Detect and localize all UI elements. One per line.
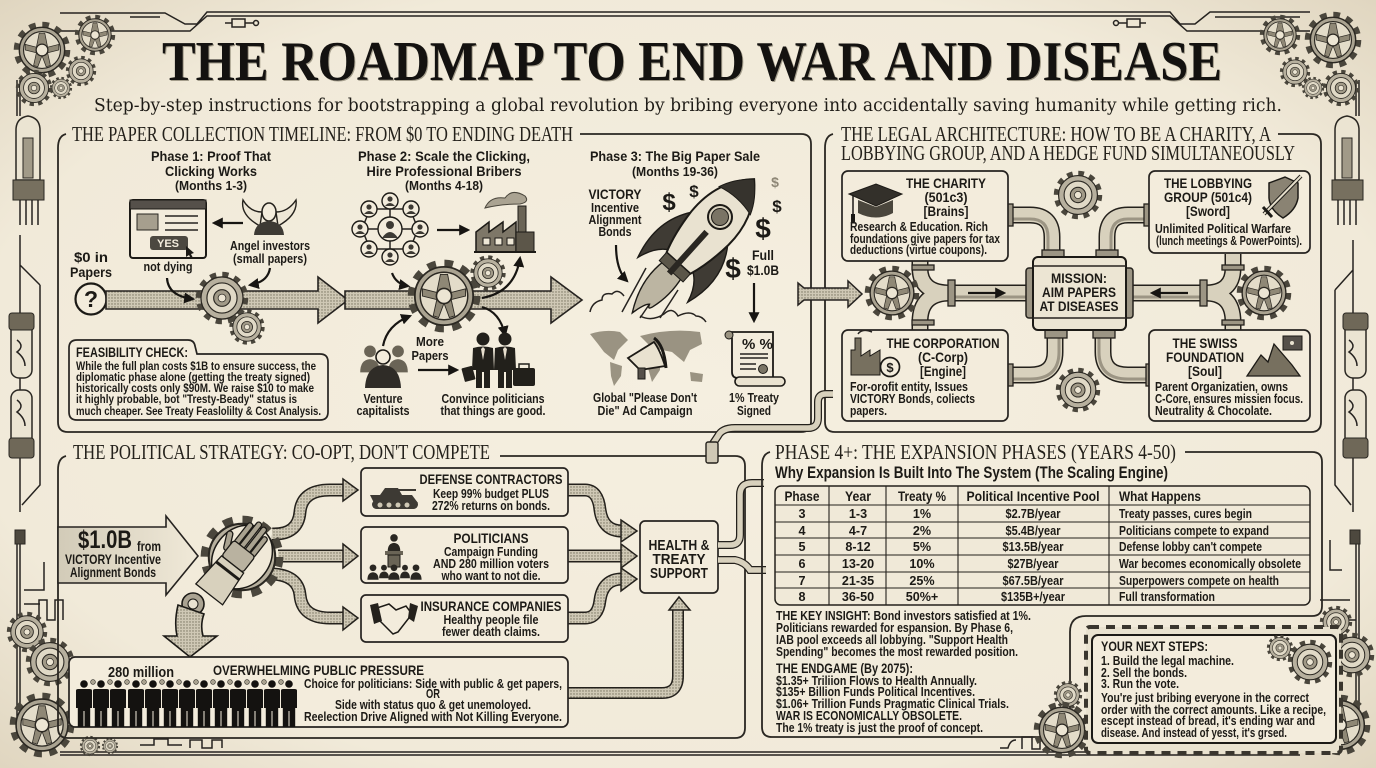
table: expansion phases: 6 xyxy=(798,557,806,571)
icons: dollar signs: $ xyxy=(771,174,779,190)
label: more papers: More xyxy=(416,335,444,349)
box: charity: [Brains] xyxy=(924,203,968,219)
phase 2 heading: Hire Professional Bribers xyxy=(366,163,522,179)
table: expansion phases: 5 xyxy=(798,540,806,554)
label: full $1.0B xyxy=(747,247,779,278)
arrows inside pipes xyxy=(968,292,1188,294)
labels: campaign and treaty: Signed xyxy=(737,404,771,418)
panel: paper collection timeline xyxy=(58,122,811,432)
side tubes left xyxy=(9,313,34,544)
phase 3 heading xyxy=(590,148,760,179)
table: expansion phases: Treaty % xyxy=(898,488,946,504)
callout: feasibility check xyxy=(69,340,328,420)
right corner gears xyxy=(1262,15,1358,104)
table: expansion phases: Year xyxy=(845,488,871,504)
icon: factory with coin xyxy=(851,330,900,376)
panel: legal architecture xyxy=(825,122,1321,432)
phase 2 heading: Phase 2: Scale the Clicking, xyxy=(358,148,530,164)
box: defense contractors: DEFENSE CONTRACTORS xyxy=(420,471,562,487)
table: expansion phases: 50%+ xyxy=(906,590,938,604)
table: expansion phases: Full transformation xyxy=(1119,590,1215,604)
table: expansion phases: Politicians compete to expand xyxy=(1119,524,1269,538)
text block: next steps: You're just bribing everyone in the correct xyxy=(1101,691,1310,705)
text block: key insight: Politicians rewarded for espansion. By Phase 6, xyxy=(776,621,1013,635)
box: charity: deductions (virtue coupons). xyxy=(850,243,987,257)
panel: expansion phases xyxy=(762,440,1322,737)
text block: endgame: $1.06+ Trillion Funds Pragmatic Clinical Trials. xyxy=(776,697,1009,711)
box: swiss foundation xyxy=(1149,330,1310,421)
text block: key insight: THE KEY INSIGHT: Bond investors satisfied at 1%. xyxy=(776,609,1031,623)
icon: mechanical hand in gear xyxy=(164,510,285,657)
icon: treaty scroll xyxy=(725,331,785,386)
box: lobbying group: THE LOBBYING xyxy=(1164,175,1252,191)
box: health and treaty support: TREATY xyxy=(652,551,706,568)
icon: treaty scroll: % % xyxy=(742,336,773,353)
box: politicians: POLITICIANS xyxy=(454,530,528,546)
icon: tank xyxy=(370,488,418,509)
heading: legal architecture: THE LEGAL ARCHITECTURE: HOW TO BE A CHARITY, A xyxy=(841,122,1272,146)
table: expansion phases: $27B/year xyxy=(1008,557,1059,571)
label: full $1.0B: $1.0B xyxy=(747,262,779,278)
box: health and treaty support: HEALTH & xyxy=(648,537,710,554)
table: expansion phases xyxy=(775,486,1310,605)
connector pipes xyxy=(706,394,833,570)
vacuum tube top left xyxy=(13,116,44,225)
table: expansion phases: $2.7B/year xyxy=(1006,507,1061,521)
box: public pressure: 280 million xyxy=(108,664,174,681)
phase 1 heading: Phase 1: Proof That xyxy=(151,148,271,164)
icon: angel investor xyxy=(243,200,296,235)
arrow: $1.0B funding: $1.0B xyxy=(78,526,132,554)
table: expansion phases: 8-12 xyxy=(845,540,871,554)
icons: dollar signs: $ xyxy=(755,213,771,244)
box: corporation: THE CORPORATION xyxy=(886,335,1000,351)
icon: graduation cap xyxy=(849,184,902,222)
text block: next steps: escept instead of bread, it's ending war and xyxy=(1101,714,1315,728)
label: victory bonds: Alignment xyxy=(588,213,642,227)
icon: shield and sword xyxy=(1263,176,1301,218)
table: expansion phases: $135B+/year xyxy=(1001,590,1065,604)
label: more papers: Papers xyxy=(412,349,448,363)
table: expansion phases: 4-7 xyxy=(849,524,867,538)
box: politicians: Campaign Funding xyxy=(444,545,538,559)
arrow: bonds to exhaust xyxy=(616,245,627,281)
table: expansion phases: 10% xyxy=(909,557,935,571)
callout: feasibility check: diplomatic phase alone (getting the treaty signed) xyxy=(76,370,310,384)
box: corporation: VICTORY Bonds, coliects xyxy=(850,392,975,406)
heading: political strategy: THE POLITICAL STRATEGY: CO-OPT, DON'T COMPETE xyxy=(73,440,490,464)
label: more papers xyxy=(412,335,448,363)
labels: vc and politicians: capitalists xyxy=(356,404,410,418)
arrow: angel to browser xyxy=(214,222,243,224)
icon: question mark start: ? xyxy=(84,286,98,312)
callout: feasibility check: historically costs only $90M. We raise $10 to make xyxy=(76,381,314,395)
box: defense contractors: Keep 99% budget PLUS xyxy=(433,487,549,501)
box: public pressure: OR xyxy=(426,687,440,701)
table: expansion phases: 21-35 xyxy=(842,574,874,588)
label: angel investors: (small papers) xyxy=(233,252,307,266)
box: public pressure xyxy=(69,657,568,727)
icon: factory xyxy=(474,192,536,252)
icon: handshake xyxy=(370,603,418,634)
icon: factory with coin: $ xyxy=(886,360,894,375)
box: charity: foundations give papers for tax xyxy=(850,232,1000,246)
text block: endgame: The 1% treaty is just the proof of concept. xyxy=(776,721,983,735)
box: insurance companies xyxy=(361,595,568,642)
box: swiss foundation: THE SWISS xyxy=(1172,335,1238,351)
box: public pressure: Side with status quo & get unemoloyed. xyxy=(335,698,531,712)
box: public pressure: OVERWHELMING PUBLIC PRESSURE xyxy=(213,662,424,678)
box: health and treaty support: SUPPORT xyxy=(650,565,708,582)
icons: dollar signs: $ xyxy=(725,253,741,284)
arrow: timeline to legal architecture xyxy=(798,281,862,307)
subtitle: Step-by-step instructions for bootstrapping a global revolution by bribing everyone into accidentally saving humanity while getting rich. xyxy=(94,96,1282,116)
arrow: $1.0B funding xyxy=(58,516,198,595)
box: lobbying group: GROUP (501c4) xyxy=(1164,189,1252,205)
arrow: $1.0B funding: from xyxy=(137,538,161,554)
arrows: phase two flows xyxy=(383,258,520,346)
box: corporation: papers. xyxy=(850,404,887,418)
icon: politicians with briefcase xyxy=(461,332,535,388)
box: corporation: For-orofit entity, Issues xyxy=(850,380,968,394)
box: politicians: AND 280 million voters xyxy=(433,557,549,571)
panel: political strategy xyxy=(58,440,745,738)
phase 3 heading: Phase 3: The Big Paper Sale xyxy=(590,148,760,164)
box: charity: (501c3) xyxy=(924,189,968,205)
icons: next steps gears xyxy=(1268,636,1330,682)
vacuum tube top right xyxy=(1332,116,1363,225)
box: public pressure: Reelection Drive Aligned with Not Killing Everyone. xyxy=(304,710,562,724)
table: expansion phases: Defense lobby can't compete xyxy=(1119,540,1262,554)
panel: your next steps xyxy=(1037,627,1341,755)
arrow: not dying to gear xyxy=(167,278,193,299)
icon: bribers network xyxy=(352,193,428,265)
text block: key insight xyxy=(776,609,1031,659)
labels: campaign and treaty: Global "Please Don't xyxy=(593,391,698,405)
text block: next steps: 1. Build the legal machine. xyxy=(1101,654,1234,668)
callout: feasibility check: it highly probable, bot "Tresty-Beady" status is xyxy=(76,392,297,406)
box: defense contractors: 272% returns on bonds. xyxy=(432,499,550,513)
arrow: funding to treaty xyxy=(753,283,755,321)
flow arrows left xyxy=(272,479,358,630)
arrow: network to factory xyxy=(437,229,468,231)
table: expansion phases: 13-20 xyxy=(842,557,874,571)
icons: dollar signs: $ xyxy=(662,189,676,216)
text block: next steps: YOUR NEXT STEPS: xyxy=(1101,638,1208,654)
arrow: small papers to gear xyxy=(250,268,270,285)
side tubes right xyxy=(1343,313,1368,544)
table: expansion phases: Political Incentive Pool xyxy=(966,488,1100,504)
icon: question mark start xyxy=(76,284,106,314)
labels: campaign and treaty xyxy=(593,391,779,418)
box: swiss foundation: Parent Organizatien, owns xyxy=(1155,380,1288,394)
box: insurance companies: fewer death claims. xyxy=(442,625,540,639)
text block: next steps: 3. Run the vote. xyxy=(1101,677,1179,691)
icon: browser window: YES xyxy=(157,238,179,250)
icons: panel gears xyxy=(867,173,1289,410)
icon: venture capitalists xyxy=(360,346,408,388)
box: corporation: [Engine] xyxy=(920,363,966,379)
table: expansion phases: $67.5B/year xyxy=(1002,574,1064,588)
labels: vc and politicians: Venture xyxy=(364,392,402,406)
label: victory bonds: Incentive xyxy=(591,201,639,215)
box: swiss foundation: C-Core, ensures missien focus. xyxy=(1155,392,1303,406)
table: expansion phases: 36-50 xyxy=(842,590,874,604)
box: charity: Research & Education. Rich xyxy=(850,220,988,234)
table: expansion phases: 5% xyxy=(913,540,931,554)
phase 1 heading: (Months 1-3) xyxy=(175,179,247,193)
table: expansion phases: 7 xyxy=(798,574,806,588)
arrow: timeline two xyxy=(345,277,582,323)
labels: campaign and treaty: Die" Ad Campaign xyxy=(598,404,692,418)
text block: next steps xyxy=(1101,638,1326,740)
label: victory bonds xyxy=(588,186,642,239)
table: expansion phases: 2% xyxy=(913,524,931,538)
table: expansion phases: Phase xyxy=(784,488,820,504)
bottom corner gears xyxy=(9,607,1372,755)
label: angel investors: Angel investors xyxy=(230,239,310,253)
table: expansion phases: 1-3 xyxy=(849,507,867,521)
icons: dollar signs: $ xyxy=(689,182,699,201)
heading: timeline: THE PAPER COLLECTION TIMELINE: FROM $0 TO ENDING DEATH xyxy=(72,122,573,146)
arrow: $1.0B funding: Alignment Bonds xyxy=(70,564,156,580)
text block: endgame: WAR IS ECONOMICALLY OBSOLETE. xyxy=(776,709,962,723)
table: expansion phases: 3 xyxy=(798,507,806,521)
phase 2 heading: (Months 4-18) xyxy=(405,179,483,193)
box: mission: AIM PAPERS xyxy=(1042,284,1116,300)
box: lobbying group: Unlimited Political Warfare xyxy=(1155,222,1291,236)
table: expansion phases: What Happens xyxy=(1119,488,1201,504)
left corner gears xyxy=(17,17,113,104)
labels: vc and politicians xyxy=(356,392,546,418)
pipes network xyxy=(912,204,1244,386)
phase 2 heading xyxy=(358,148,530,193)
text block: endgame: THE ENDGAME (By 2075): xyxy=(776,660,913,676)
table: expansion phases: 8 xyxy=(798,590,806,604)
icon: phase two gears xyxy=(411,257,504,329)
box: swiss foundation: Neutrality & Chocolate. xyxy=(1155,404,1272,418)
label: angel investors xyxy=(230,239,310,266)
box: lobbying group: (lunch meetings & PowerPoints). xyxy=(1156,234,1302,248)
heading: legal architecture xyxy=(841,122,1295,165)
text block: key insight: IAB pool exceeds all lobbying. "Support Health xyxy=(776,633,1008,647)
table: expansion phases: Superpowers compete on health xyxy=(1119,574,1279,588)
arrow: vc to politicians xyxy=(418,369,457,371)
table: expansion phases: 1% xyxy=(913,507,931,521)
box: mission xyxy=(1026,257,1133,330)
box: corporation xyxy=(842,330,1008,421)
box: lobbying group xyxy=(1149,171,1310,253)
title: THE ROADMAP TO END WAR AND DISEASE xyxy=(162,31,1222,93)
arrow: timeline one xyxy=(106,277,348,323)
label: victory bonds: Bonds xyxy=(598,225,632,239)
box: corporation: (C-Corp) xyxy=(918,349,968,365)
text block: next steps: disease. And instead of yesst, it's grsed. xyxy=(1101,726,1287,740)
phase 3 heading: (Months 19-36) xyxy=(632,165,718,179)
callout: feasibility check: much cheaper. See Treaty Feaslolilty & Cost Analysis. xyxy=(76,404,321,418)
icons: dollar signs: $ xyxy=(772,197,782,216)
table: expansion phases: 4 xyxy=(798,524,806,538)
label: $0 in papers: Papers xyxy=(70,264,112,280)
phase 1 heading xyxy=(151,148,271,193)
icon: world map with megaphone xyxy=(590,331,703,386)
icon: crowd of people xyxy=(76,680,297,727)
box: politicians xyxy=(361,527,568,583)
table: expansion phases: 25% xyxy=(909,574,935,588)
label: full $1.0B: Full xyxy=(752,247,774,263)
box: politicians: who want to not die. xyxy=(441,569,540,583)
box: insurance companies: INSURANCE COMPANIES xyxy=(420,598,562,614)
labels: vc and politicians: Convince politicians xyxy=(442,392,544,406)
box: public pressure: Choice for politicians: Side with public & get papers, xyxy=(304,677,562,691)
icon: mountains and flag xyxy=(1247,336,1302,376)
box: swiss foundation: FOUNDATION xyxy=(1166,349,1244,365)
text block: next steps: order with the correct amounts. Like a recipe, xyxy=(1101,703,1326,717)
label: $0 in papers: $0 in xyxy=(74,249,108,265)
subheading: scaling engine: Why Expansion Is Built Into The System (The Scaling Engine) xyxy=(775,464,1168,482)
label: not dying: not dying xyxy=(144,260,192,274)
arrow: $1.0B funding: VICTORY Incentive xyxy=(65,551,161,567)
text block: next steps: 2. Sell the bonds. xyxy=(1101,666,1187,680)
box: swiss foundation: [Soul] xyxy=(1188,363,1222,379)
table: expansion phases: Treaty passes, cures begin xyxy=(1119,507,1252,521)
box: lobbying group: [Sword] xyxy=(1186,203,1230,219)
table: expansion phases: $13.5B/year xyxy=(1002,540,1064,554)
heading: expansion phases: PHASE 4+: THE EXPANSION PHASES (YEARS 4-50) xyxy=(775,440,1176,464)
label: victory bonds: VICTORY xyxy=(588,186,642,202)
box: mission: AT DISEASES xyxy=(1040,298,1118,314)
box: defense contractors xyxy=(361,468,568,516)
icon: podium and audience xyxy=(367,534,422,580)
box: charity: THE CHARITY xyxy=(906,175,987,191)
icon: phase one gears xyxy=(198,274,263,343)
text block: endgame: $135+ Billion Funds Political Incentives. xyxy=(776,685,975,699)
text block: endgame: $1.35+ Triliion Flows to Health Annually. xyxy=(776,674,977,688)
callout: feasibility check: FEASIBILITY CHECK: xyxy=(76,344,188,360)
callout: feasibility check: While the full plan costs $1B to ensure success, the xyxy=(76,359,316,373)
box: mission: MISSION: xyxy=(1051,270,1107,286)
label: $0 in papers xyxy=(70,249,112,280)
box: charity xyxy=(842,171,1008,261)
icon: browser window xyxy=(130,200,206,259)
labels: campaign and treaty: 1% Treaty xyxy=(729,391,779,405)
labels: vc and politicians: that things are good. xyxy=(440,404,546,418)
arrow: public pressure to support xyxy=(568,597,690,693)
text block: endgame xyxy=(776,660,1009,735)
table: expansion phases: War becomes economically obsolete xyxy=(1119,557,1301,571)
flow arrows right xyxy=(568,490,637,618)
phase 1 heading: Clicking Works xyxy=(165,163,257,179)
text block: key insight: Spending" becomes the most rewarded position. xyxy=(776,645,1018,659)
table: expansion phases: $5.4B/year xyxy=(1006,524,1061,538)
box: health and treaty support xyxy=(640,521,718,593)
icons: dollar signs xyxy=(662,174,782,284)
box: insurance companies: Healthy people file xyxy=(444,613,538,627)
icon: rocket xyxy=(590,154,782,339)
